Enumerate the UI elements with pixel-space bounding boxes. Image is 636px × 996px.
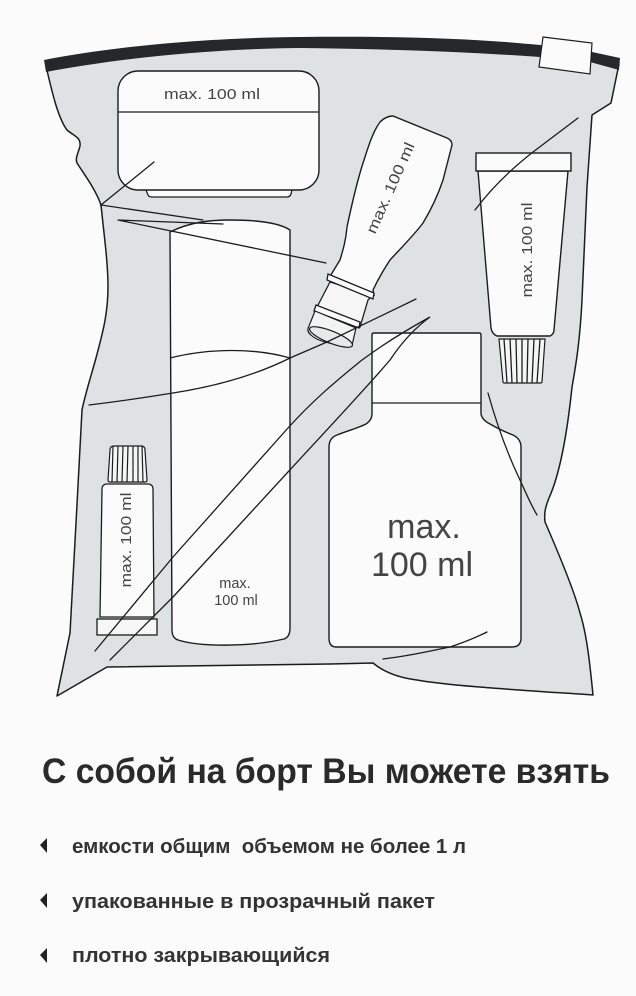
- transparent bag with items: [44, 37, 620, 696]
- bullet 1: емкости общим объемом не более 1 л: [72, 835, 466, 858]
- large bottle: [329, 333, 521, 647]
- large bottle label: 100 ml: [371, 546, 473, 584]
- tall bottle label: 100 ml: [214, 593, 258, 609]
- large bottle label: max.: [387, 508, 461, 546]
- bag outline: [46, 42, 619, 696]
- zip slider: [539, 37, 592, 74]
- tube label: max. 100 ml: [519, 202, 536, 298]
- small tube cap: [108, 446, 147, 482]
- dropper neck: [315, 282, 373, 327]
- tall bottle label: max.: [219, 576, 251, 592]
- tall bottle: [170, 220, 290, 645]
- bullet 2: упакованные в прозрачный пакет: [72, 890, 435, 913]
- tube body: [478, 171, 568, 336]
- small tube: [97, 446, 157, 635]
- small tube label: max. 100 ml: [118, 492, 135, 588]
- upper right tube: [476, 153, 571, 383]
- small tube body: [100, 484, 154, 617]
- dropper bottle: [307, 116, 452, 351]
- jar body: [118, 71, 319, 190]
- heading: С собой на борт Вы можете взять: [42, 752, 610, 791]
- dropper rings: [327, 274, 374, 299]
- zip seal band: [44, 37, 620, 72]
- bag crease lines: [89, 118, 578, 660]
- jar: [118, 71, 319, 197]
- jar label: max. 100 ml: [164, 86, 260, 103]
- bullet 3: плотно закрывающийся: [72, 944, 330, 967]
- bullet list: [40, 835, 466, 967]
- tube cap: [499, 339, 545, 383]
- jar base: [146, 190, 292, 197]
- dropper label: max. 100 ml: [363, 140, 419, 236]
